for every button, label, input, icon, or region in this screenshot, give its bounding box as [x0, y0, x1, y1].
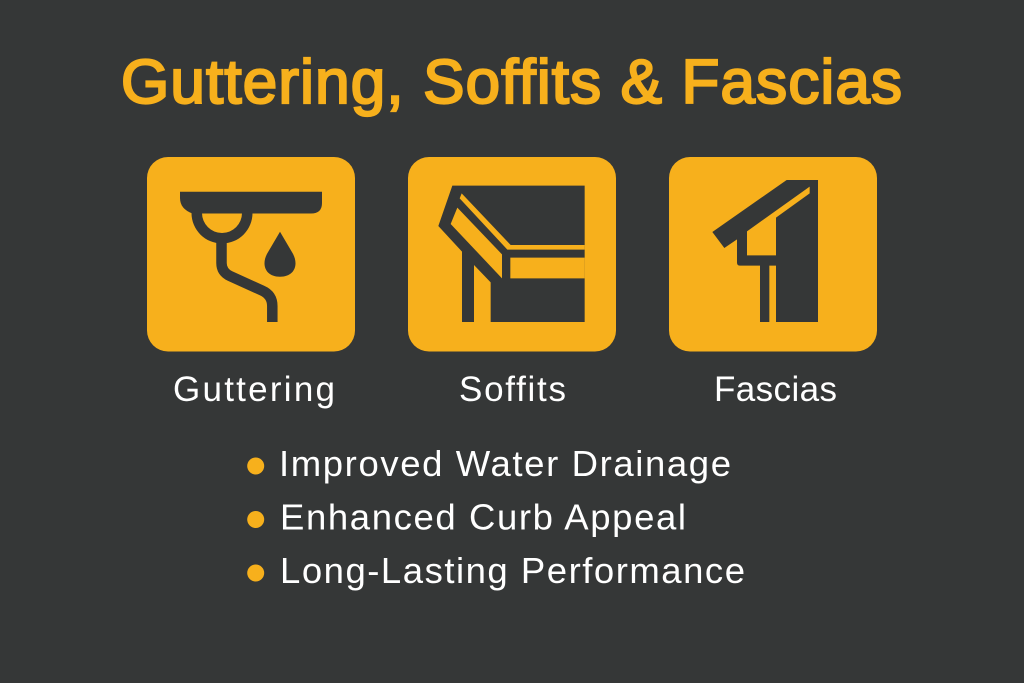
icon: soffit roof section [438, 186, 585, 322]
panel: soffits [408, 157, 616, 409]
bullet: long-lasting performance: Long-Lasting Performance [280, 550, 745, 591]
icon tile: soffits [408, 157, 616, 352]
icon: water drop [264, 232, 296, 277]
title: Guttering, Soffits & Fascias [121, 48, 902, 117]
label: soffits: Soffits [459, 370, 566, 409]
bullet: improved water drainage: Improved Water Drainage [279, 443, 731, 484]
icon tile: guttering [147, 157, 355, 352]
label: guttering: Guttering [173, 370, 335, 409]
panel: fascias [669, 157, 877, 409]
icon: fascia roof section [712, 180, 818, 322]
bullet: enhanced curb appeal: Enhanced Curb Appeal [280, 496, 686, 538]
panel: guttering [147, 157, 355, 409]
label: fascias: Fascias [714, 370, 837, 409]
icon: gutter and downpipe [180, 192, 322, 322]
benefits list [247, 443, 745, 591]
icon tile: fascias [669, 157, 877, 352]
